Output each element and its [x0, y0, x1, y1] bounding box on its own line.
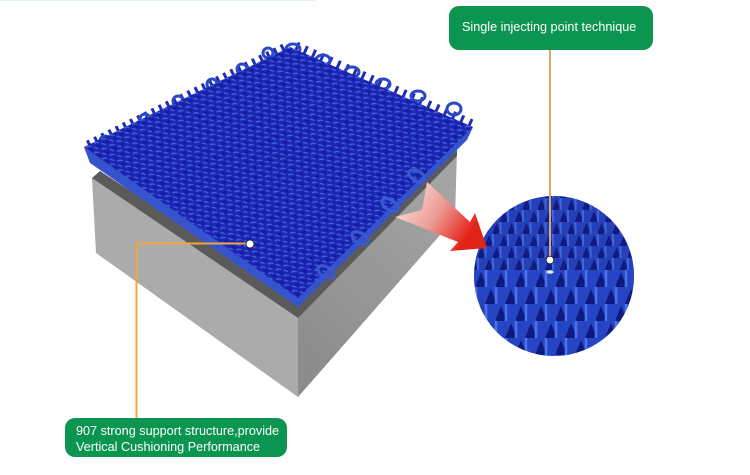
mat side edge — [84, 127, 473, 307]
top edge accent — [0, 0, 315, 1]
leader line — [549, 50, 551, 260]
mat connector loops — [100, 44, 461, 146]
label text: Single injecting point technique — [462, 20, 636, 34]
mat lower-right tabs — [316, 167, 427, 281]
leader line — [136, 244, 248, 418]
foam block — [92, 150, 457, 397]
magnified circle — [474, 196, 634, 356]
red arrow — [395, 182, 487, 251]
callout: support structure — [65, 240, 287, 457]
mat edge spikes — [88, 46, 472, 145]
callout: single injecting point — [449, 6, 653, 264]
marker dot — [246, 240, 254, 248]
blue mat tile — [84, 44, 473, 307]
marker dot — [546, 256, 554, 264]
mat woven surface — [84, 47, 473, 298]
label box — [449, 6, 653, 50]
callout: support structure: Vertical Cushioning Performance — [76, 440, 260, 454]
label text: 907 strong support structure,provide — [76, 424, 279, 438]
label box — [65, 418, 287, 457]
